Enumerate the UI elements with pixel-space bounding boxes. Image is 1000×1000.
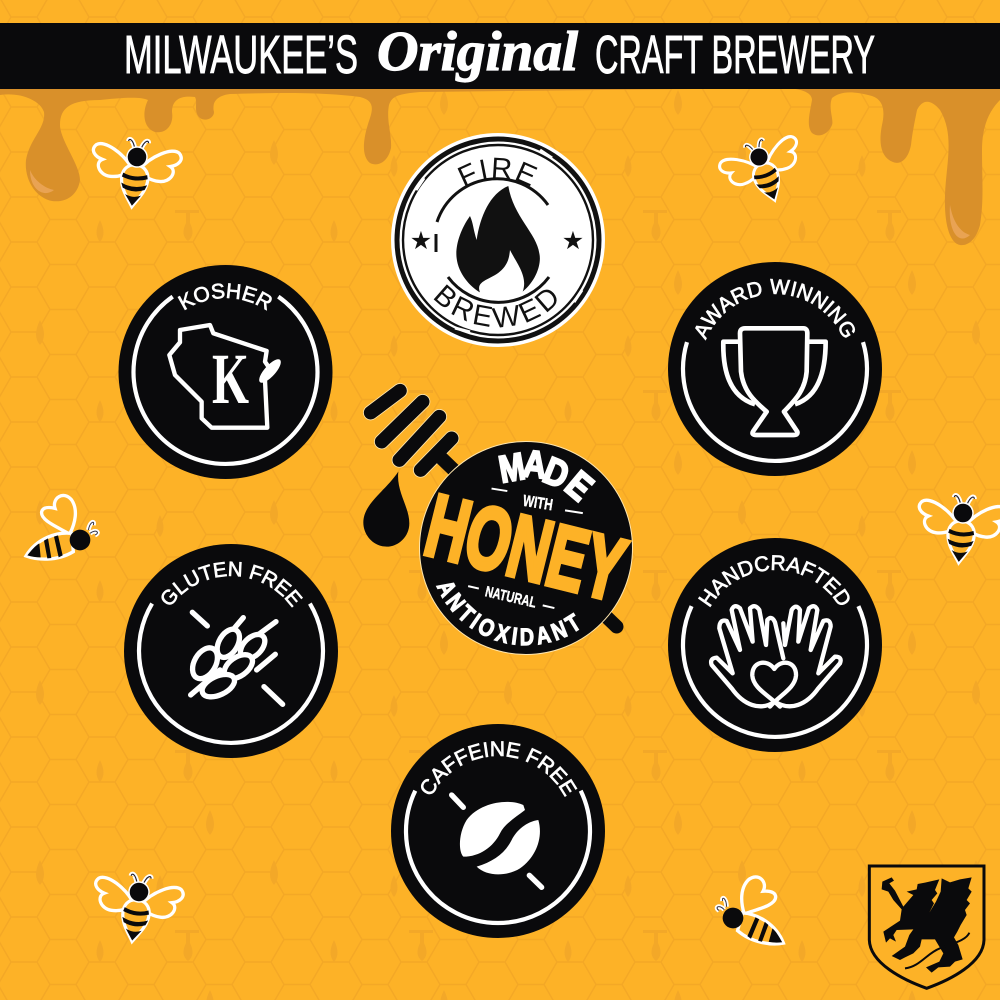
icon: stars: ★ [410,227,432,255]
heading: original: Original [377,21,578,83]
badge: award winning [668,262,882,476]
label: fire: FIRE [458,158,538,186]
label: GLUTEN FREE [161,561,303,608]
label: with [489,488,585,519]
label: made: A [521,443,549,487]
bee: top right [716,129,813,214]
label: made: M [496,446,528,491]
icon: stars: ★ [562,227,584,255]
label: HANDCRAFTED [698,555,850,608]
heading: milwaukee's: MILWAUKEE’S [124,25,358,85]
label: antioxidant: I [510,622,519,650]
icon: honey dipper [363,391,617,627]
bee: bottom left [88,869,185,948]
label: antioxidant: A [431,576,462,601]
label: made [496,443,601,509]
label: made: D [537,449,575,497]
label: CAFFEINE FREE [420,741,578,797]
label: with: WITH [522,493,554,514]
label: AWARD WINNING [695,278,856,341]
badge: caffeine free [391,724,605,938]
label: antioxidant: T [561,608,586,638]
icon: crossed wheat [187,612,283,704]
label: antioxidant: N [441,588,471,616]
label: antioxidant: I [466,608,486,634]
bee: left [26,495,97,559]
label: natural: NATURAL [483,583,538,612]
icon: wisconsin k [169,325,284,428]
icon: wisconsin k: K [212,339,249,419]
label: antioxidant: D [520,623,534,651]
badge: kosher [118,265,332,479]
label: made: E [557,463,601,509]
label: antioxidant: A [534,620,553,650]
badge: made with honey [363,391,635,654]
honey drips [0,80,1000,245]
label: KOSHER [178,283,272,311]
label: antioxidant: O [474,612,500,643]
icon: flame [456,186,540,292]
bee: bottom right [713,871,794,946]
bee: right [915,492,1000,567]
label: antioxidant [431,576,586,651]
label: antioxidant: T [453,600,480,628]
label: brewed: BREWED [434,284,557,328]
icon: stars [410,227,584,255]
icon: coffee bean [452,795,542,887]
badge: gluten free [124,544,338,758]
logo: griffin shield [869,866,984,988]
label: antioxidant: X [493,619,513,649]
bee: top left [88,136,183,211]
icon: trophy [723,328,826,435]
header band [0,21,1000,89]
badge: handcrafted [668,538,882,752]
icon: hands and heart [711,606,841,707]
icon: honey drop [363,472,409,547]
badge: fire brewed [391,133,605,347]
label: honey: HONEY [417,475,635,620]
label: antioxidant: N [547,615,571,646]
